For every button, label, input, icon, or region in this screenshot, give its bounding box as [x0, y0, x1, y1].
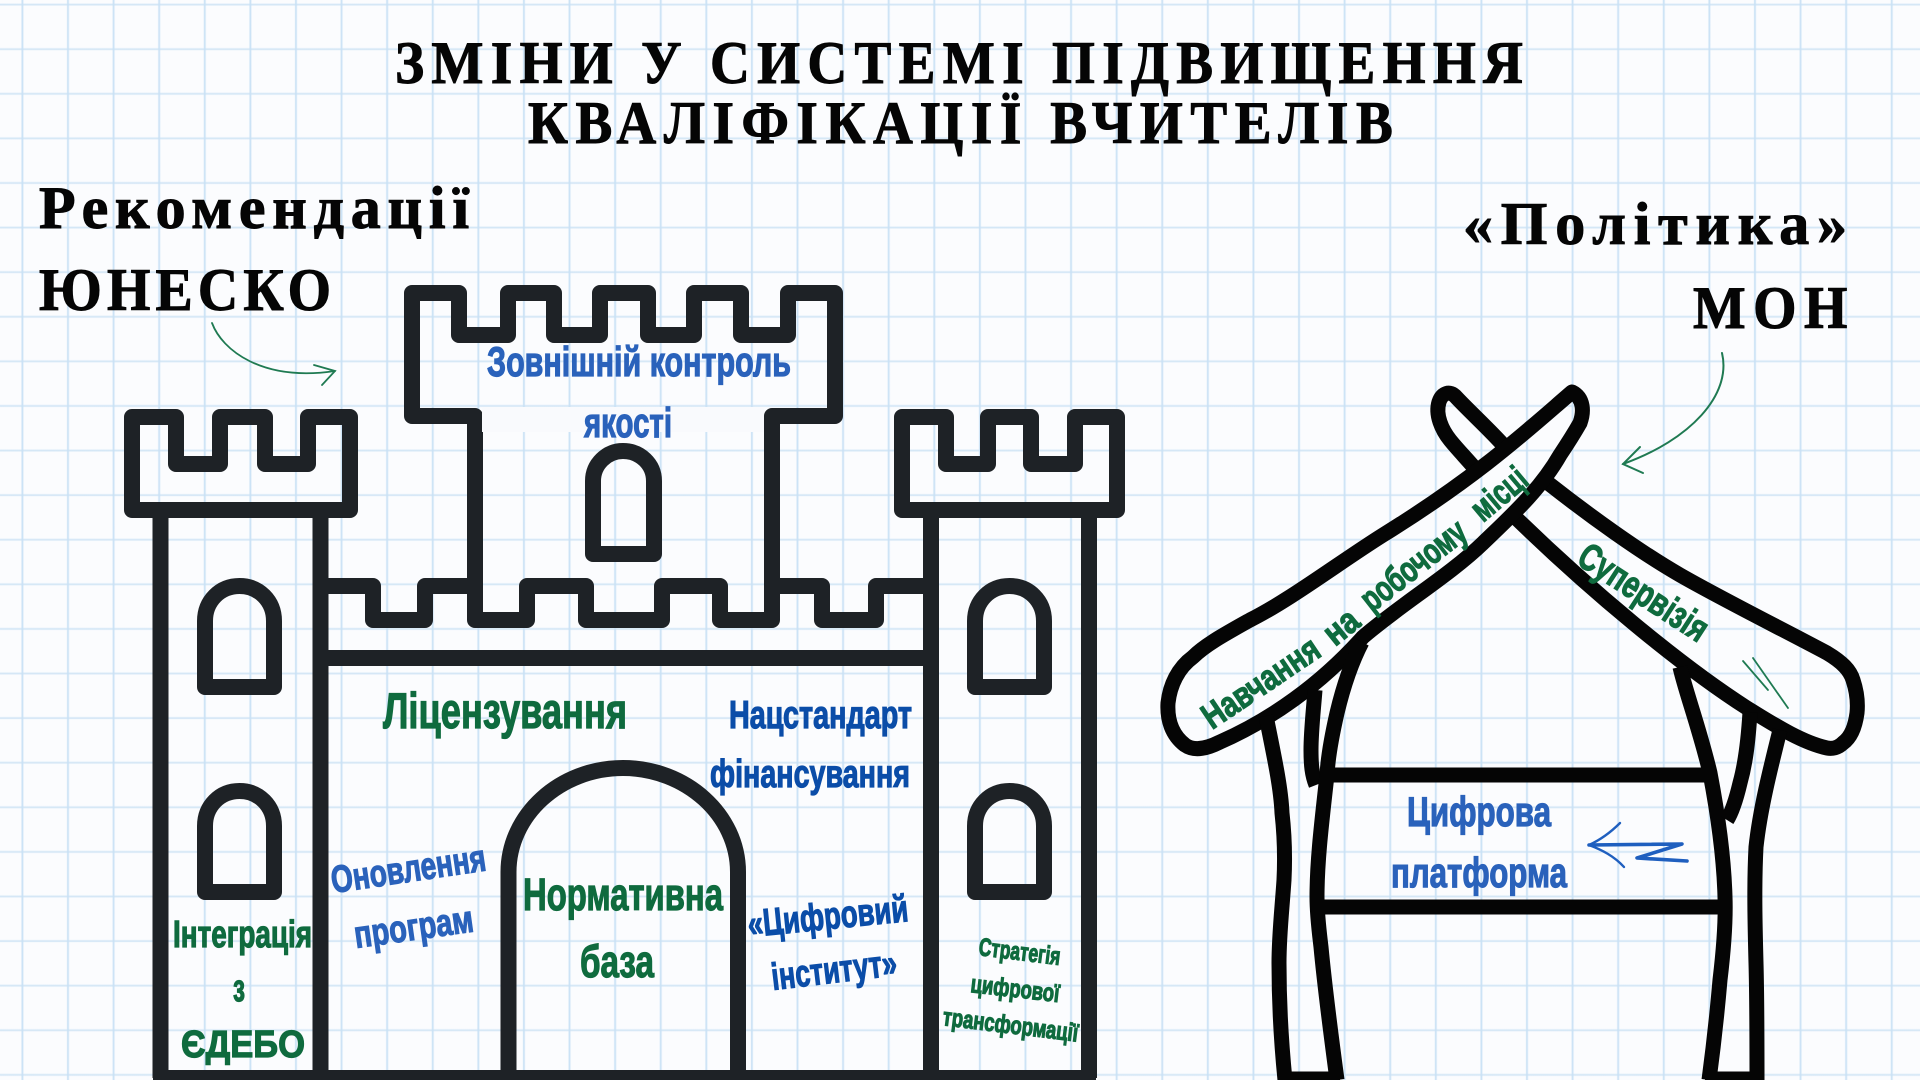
label: digital platform — [1391, 788, 1567, 896]
castle: left upper window — [205, 586, 274, 687]
arrow: UNESCO to castle — [212, 323, 335, 385]
castle: left tower walls — [160, 510, 320, 1078]
label: EDEBO integration: ЄДЕБО — [181, 1024, 305, 1066]
label: EDEBO integration — [173, 914, 312, 1066]
castle: battlement — [320, 586, 931, 620]
label: digital institute: інститут» — [769, 942, 899, 999]
label: national funding standard: фінансування — [710, 753, 910, 796]
label: digital transformation strategy: Стратегія — [977, 933, 1062, 971]
castle: gate arch — [508, 768, 738, 1078]
label: EDEBO integration: Інтеграція — [173, 914, 312, 956]
label: digital institute — [746, 888, 910, 999]
label: digital platform: Цифрова — [1407, 788, 1551, 835]
label: regulatory base: Нормативна — [523, 869, 724, 920]
label: digital institute: «Цифровий — [746, 888, 910, 946]
label: licensing: Ліцензування — [383, 683, 627, 739]
title: ЗМІНИ У СИСТЕМІ ПІДВИЩЕННЯ — [395, 31, 1523, 97]
label: digital transformation strategy: трансформації — [941, 1003, 1080, 1048]
title — [395, 31, 1523, 157]
gazebo illustration — [1168, 392, 1857, 1080]
label: on-the-job training — [1194, 458, 1536, 737]
gazebo: left roof beam — [1168, 392, 1582, 749]
heading: ministry policy — [1463, 191, 1847, 341]
gazebo: posts — [1266, 642, 1780, 1080]
label: on-the-job training: на — [1314, 599, 1368, 653]
castle: right tower crown — [902, 417, 1117, 510]
label: on-the-job training: місці — [1462, 458, 1536, 529]
label: EDEBO integration: з — [233, 968, 245, 1010]
label: regulatory base: база — [580, 936, 655, 987]
castle: right lower window — [975, 791, 1044, 892]
heading: UNESCO recommendations: Рекомендації — [39, 175, 469, 241]
label: external quality control — [487, 338, 791, 446]
arrow: ministry to roof — [1623, 353, 1723, 473]
icon: small sketch marks on roof — [1743, 658, 1788, 708]
heading: UNESCO recommendations — [39, 175, 469, 323]
label: supervision: Супервізія — [1570, 535, 1716, 651]
heading: ministry policy: МОН — [1693, 274, 1847, 341]
heading: UNESCO recommendations: ЮНЕСКО — [39, 256, 331, 323]
castle: centre tower — [412, 293, 835, 586]
label: digital platform: платформа — [1391, 849, 1567, 896]
label: national funding standard — [710, 694, 912, 796]
castle illustration — [132, 293, 1117, 1078]
label: external quality control: Зовнішній контроль — [487, 338, 791, 385]
gazebo: crossbars — [1318, 775, 1724, 907]
castle: wall band — [320, 650, 931, 666]
label: on-the-job training: Навчання — [1194, 628, 1328, 737]
label: program update — [328, 838, 489, 957]
arrow: blue hand-drawn arrow — [1589, 823, 1687, 867]
label: digital transformation strategy: цифрової — [969, 970, 1062, 1008]
label: program update: програм — [351, 899, 476, 957]
label: national funding standard: Нацстандарт — [729, 694, 912, 737]
castle: centre tower window — [593, 451, 654, 554]
label: external quality control: якості — [583, 399, 672, 446]
title: КВАЛІФІКАЦІЇ ВЧИТЕЛІВ — [528, 91, 1393, 157]
castle: right upper window — [975, 586, 1044, 687]
castle: left tower crown — [132, 417, 350, 510]
gazebo: right roof beam — [1438, 393, 1857, 748]
label: digital transformation strategy — [941, 933, 1080, 1048]
heading: ministry policy: «Політика» — [1463, 191, 1847, 257]
label: program update: Оновлення — [328, 838, 489, 902]
label: on-the-job training: робочому — [1352, 511, 1475, 619]
castle: ground line — [153, 1070, 1096, 1080]
label: regulatory base — [523, 869, 724, 987]
castle: right tower walls — [931, 510, 1089, 1078]
castle: left lower window — [205, 791, 274, 892]
